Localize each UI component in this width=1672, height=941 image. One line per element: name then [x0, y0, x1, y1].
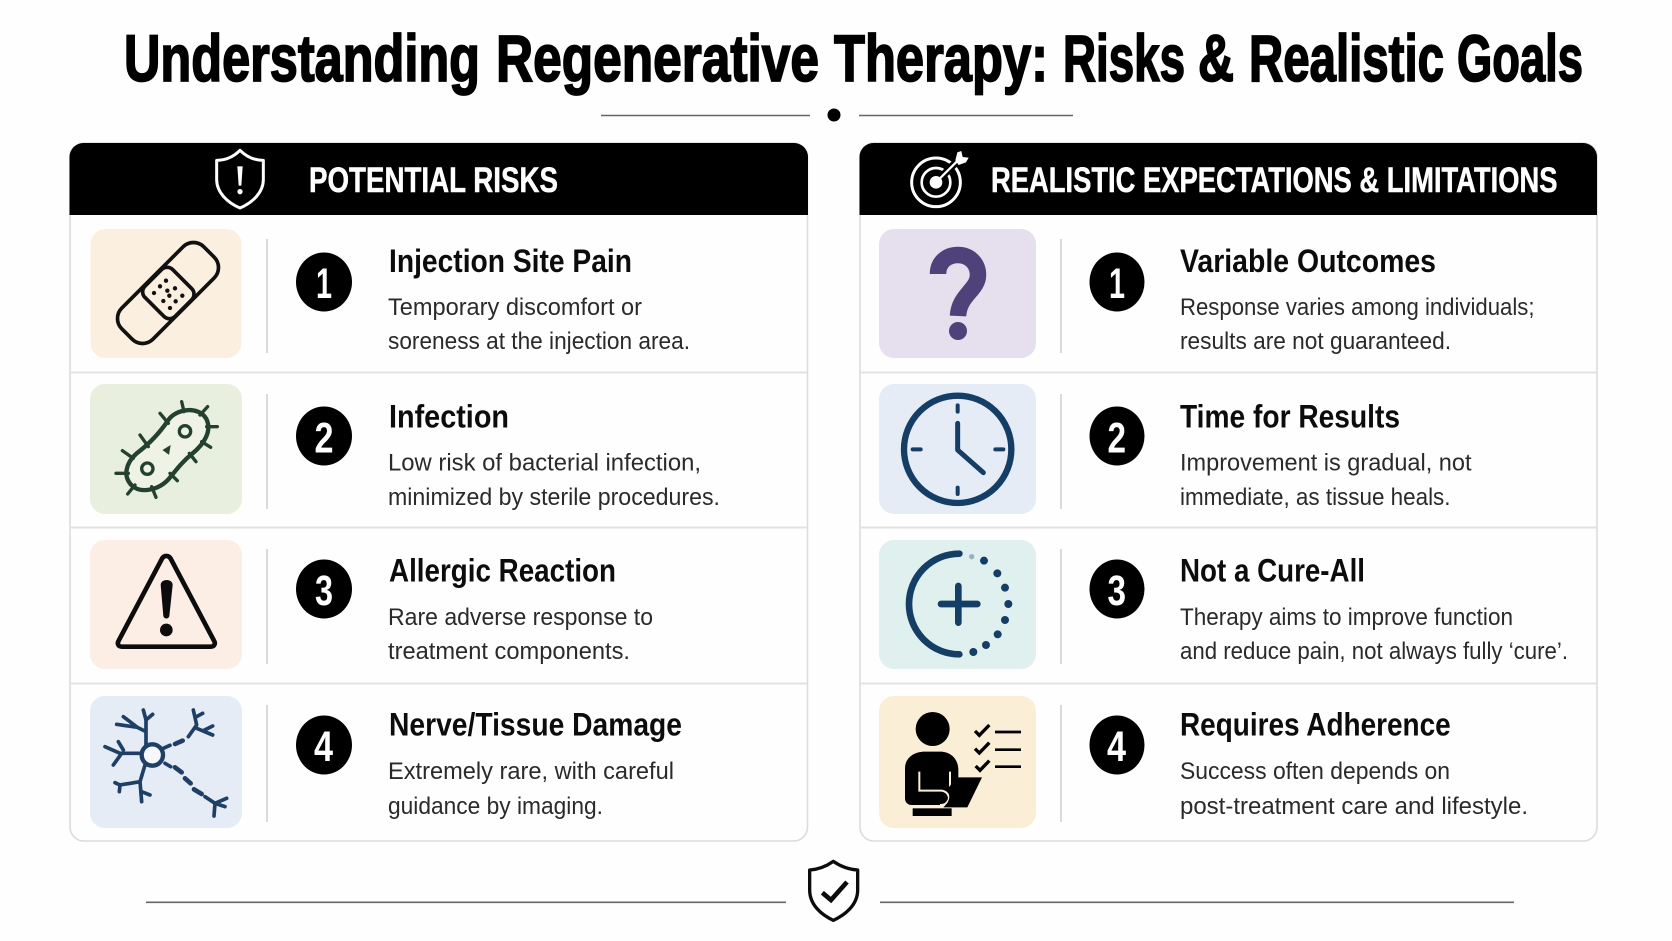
text: variable outcomes: results are not guaranteed.	[1180, 328, 1451, 355]
text: infection: Low risk of bacterial infection,	[388, 450, 701, 477]
text: variable outcomes: Variable Outcomes	[1180, 243, 1436, 279]
text: not a cure-all: Not a Cure-All	[1180, 552, 1365, 588]
number badge 3: 3	[1108, 567, 1126, 615]
number badge 1: 1	[1109, 260, 1125, 308]
text: not a cure-all	[1180, 552, 1568, 665]
number badge 4	[1090, 716, 1144, 774]
heading: potential risks: POTENTIAL RISKS	[309, 160, 558, 200]
title	[124, 21, 1583, 95]
title: Goals	[1457, 21, 1583, 95]
icon: shield with exclamation	[217, 150, 263, 208]
number badge 2: 2	[314, 414, 334, 462]
number badge 4: 4	[1107, 723, 1126, 771]
text: requires adherence: Requires Adherence	[1180, 706, 1451, 742]
text: injection site pain: Injection Site Pain	[389, 243, 632, 279]
expectation 2: time for results	[879, 384, 1472, 514]
text: requires adherence	[1180, 706, 1528, 820]
number badge 1	[296, 252, 352, 312]
title divider	[601, 108, 1073, 122]
panel header: realistic expectations	[860, 143, 1597, 215]
row dividers	[71, 372, 807, 684]
text: time for results	[1180, 399, 1472, 511]
expectation 4: requires adherence	[879, 696, 1528, 828]
risk 4: nerve and tissue damage	[90, 696, 682, 828]
panel: potential risks	[70, 143, 808, 841]
risk 2: infection	[90, 384, 720, 514]
text: nerve tissue damage: guidance by imaging.	[388, 793, 603, 820]
risk 1: injection site pain	[90, 229, 690, 358]
text: nerve tissue damage: Nerve/Tissue Damage	[389, 706, 682, 742]
text: time for results: Improvement is gradual, not	[1180, 450, 1472, 477]
text: variable outcomes: Response varies among individuals;	[1180, 294, 1534, 321]
text: not a cure-all: and reduce pain, not always fully ‘cure’.	[1180, 638, 1568, 665]
text: allergic reaction	[388, 552, 653, 665]
text: nerve tissue damage	[388, 706, 682, 820]
text: injection site pain: Temporary discomfort or	[388, 294, 642, 321]
icon: bacterium	[90, 384, 242, 514]
icon: shield with check	[810, 861, 858, 920]
text: allergic reaction: treatment components.	[388, 638, 630, 665]
title: Therapy:	[834, 21, 1048, 95]
panel header: potential risks	[70, 143, 808, 215]
expectation 3: not a cure-all	[879, 540, 1568, 669]
icon: warning triangle	[90, 540, 242, 669]
text: requires adherence: post-treatment care and lifestyle.	[1180, 793, 1528, 820]
icon: question mark	[879, 229, 1036, 358]
text: time for results: immediate, as tissue heals.	[1180, 484, 1450, 511]
number badge 1: 1	[316, 260, 332, 308]
text: requires adherence: Success often depends on	[1180, 758, 1450, 785]
text: injection site pain: soreness at the injection area.	[388, 328, 690, 355]
number badge 4: 4	[314, 723, 333, 771]
icon: damaged neuron	[90, 696, 242, 828]
title: &	[1198, 21, 1234, 95]
icon: partial circle with plus	[879, 540, 1036, 669]
text: infection: minimized by sterile procedures.	[388, 484, 720, 511]
text: infection	[388, 399, 720, 511]
text: allergic reaction: Allergic Reaction	[389, 552, 616, 588]
number badge 3: 3	[315, 567, 333, 615]
number badge 1	[1090, 252, 1144, 312]
text: infection: Infection	[389, 399, 509, 435]
icon: bandage	[90, 229, 242, 358]
icon: person with checklist	[879, 696, 1036, 828]
footer divider with shield check icon	[146, 861, 1514, 920]
title: Understanding	[124, 21, 480, 95]
number badge 3	[296, 560, 352, 618]
title: Risks	[1063, 21, 1185, 95]
text: nerve tissue damage: Extremely rare, with careful	[388, 758, 674, 785]
text: allergic reaction: Rare adverse response to	[388, 604, 653, 631]
icon: target with arrow	[912, 151, 969, 207]
row dividers	[861, 372, 1596, 684]
title: Realistic	[1249, 21, 1444, 95]
number badge 3	[1090, 560, 1144, 618]
number badge 2	[1090, 406, 1144, 466]
number badge 4	[296, 716, 352, 774]
text: time for results: Time for Results	[1180, 399, 1400, 435]
number badge 2: 2	[1108, 414, 1126, 462]
text: injection site pain	[388, 243, 690, 355]
panel: realistic expectations and limitations	[860, 143, 1597, 841]
text: variable outcomes	[1180, 243, 1534, 355]
risk 3: allergic reaction	[90, 540, 653, 669]
text: not a cure-all: Therapy aims to improve function	[1180, 604, 1513, 631]
icon: clock	[879, 384, 1036, 514]
number badge 2	[296, 406, 352, 466]
title: Regenerative	[496, 21, 819, 95]
expectation 1: variable outcomes	[879, 229, 1534, 358]
